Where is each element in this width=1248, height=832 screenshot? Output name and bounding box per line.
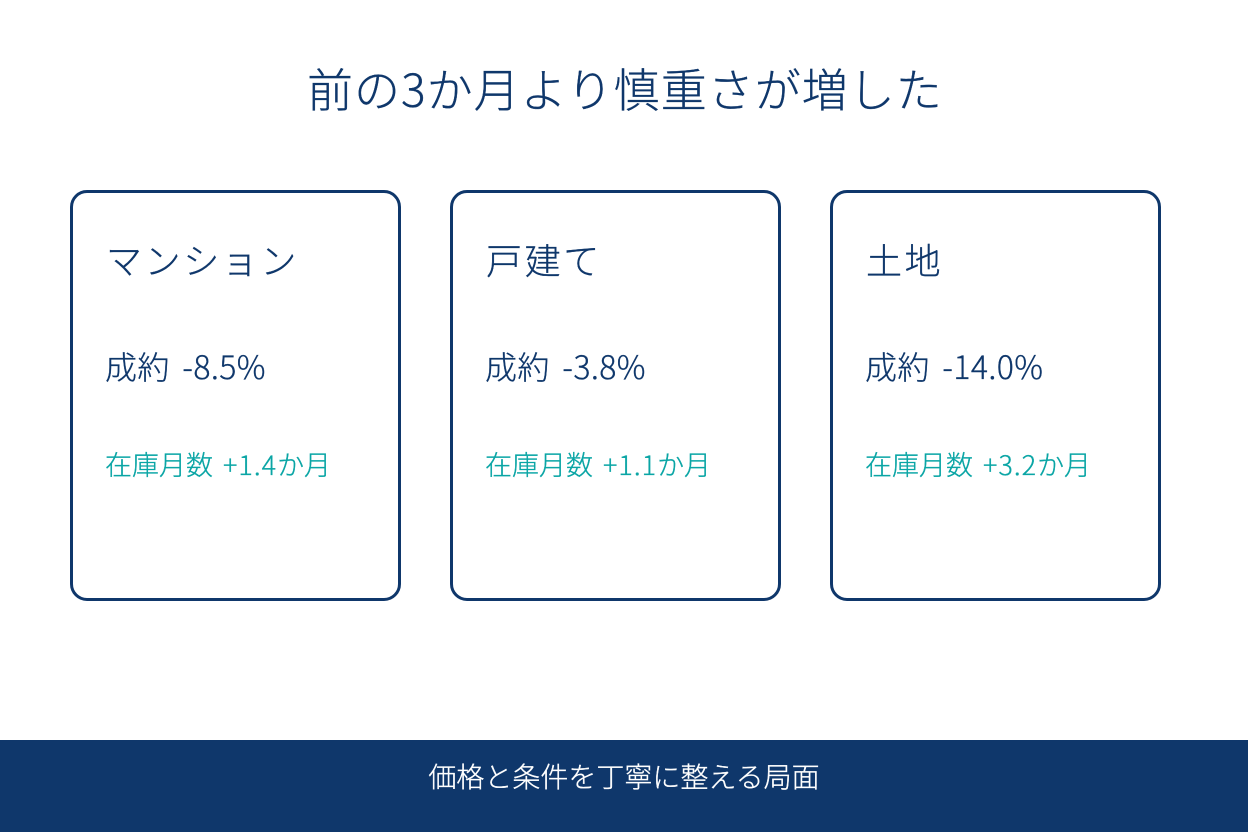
stat: 成約: 成約 -3.8% (485, 343, 646, 389)
panel: マンション (70, 190, 401, 601)
title: 前の3か月より慎重さが増した (307, 55, 943, 121)
panel: 戸建て (450, 190, 781, 601)
stat: 成約: 成約 -14.0% (865, 343, 1043, 389)
heading: マンション: マンション (106, 233, 299, 285)
stat: 在庫月数: 在庫月数 +1.1か月 (485, 444, 711, 483)
panel: 土地 (830, 190, 1161, 601)
heading: 戸建て: 戸建て (486, 233, 602, 285)
heading: 土地: 土地 (866, 233, 943, 285)
stat: 成約: 成約 -8.5% (105, 343, 266, 389)
footer text: 価格と条件を丁寧に整える局面 (428, 756, 820, 796)
stat: 在庫月数: 在庫月数 +3.2か月 (865, 444, 1091, 483)
footer band (0, 740, 1248, 832)
stat: 在庫月数: 在庫月数 +1.4か月 (105, 444, 331, 483)
